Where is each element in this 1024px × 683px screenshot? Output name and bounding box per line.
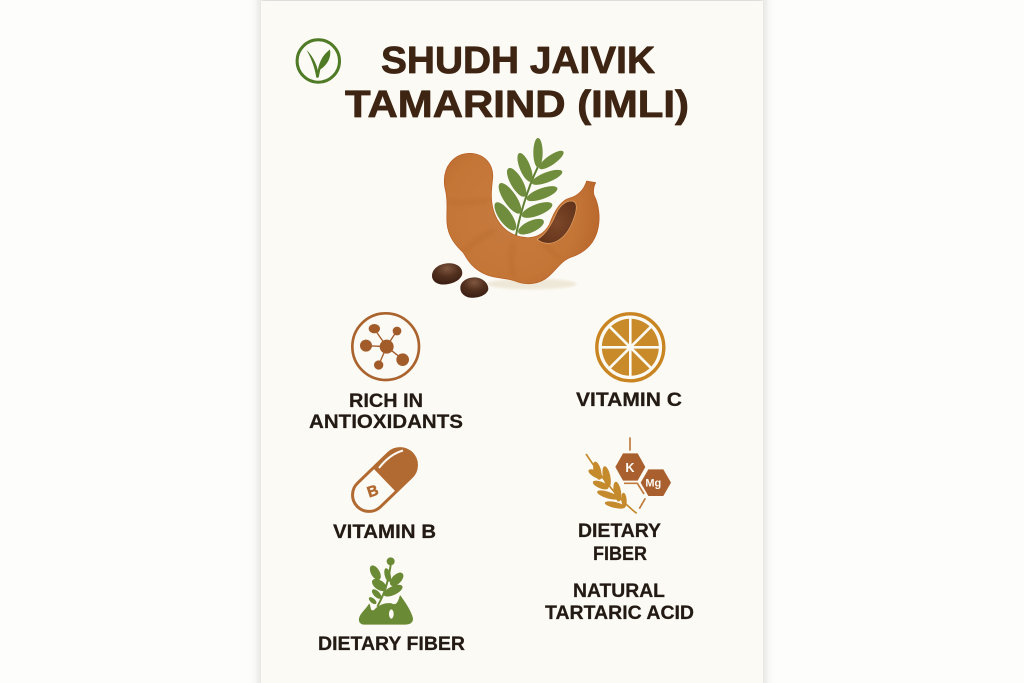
icon: molecule xyxy=(352,313,419,380)
feature: vitamin C xyxy=(576,314,682,411)
icon: organic leaf badge xyxy=(297,40,339,82)
label: DIETARY xyxy=(578,521,661,542)
feature: dietary fiber (wheat and minerals) xyxy=(578,437,671,565)
icon: orange slice xyxy=(597,314,664,381)
label xyxy=(578,521,661,565)
seeds xyxy=(432,263,488,298)
label: ANTIOXIDANTS xyxy=(309,412,463,433)
label: RICH IN xyxy=(349,391,423,412)
pod body xyxy=(444,153,599,284)
icon: green plant on mound xyxy=(359,557,413,625)
feature: dietary fiber (plant) xyxy=(318,557,465,655)
hexagon: K xyxy=(615,453,645,481)
pod creases xyxy=(448,200,560,280)
icon: capsule: B xyxy=(365,482,381,501)
pod opening xyxy=(537,201,576,243)
icon: wheat with mineral hexagons: K xyxy=(625,461,635,475)
label: VITAMIN B xyxy=(333,522,436,543)
label: natural tartaric acid: NATURAL xyxy=(573,581,665,602)
label: natural tartaric acid: TARTARIC ACID xyxy=(545,603,694,624)
label: VITAMIN C xyxy=(576,390,682,411)
panel shadow xyxy=(259,0,765,683)
label: FIBER xyxy=(593,544,647,565)
label: natural tartaric acid xyxy=(545,581,694,624)
icon: wheat with mineral hexagons xyxy=(586,437,671,513)
feature: vitamin B xyxy=(333,442,436,543)
feature: rich in antioxidants xyxy=(309,313,463,433)
label: DIETARY FIBER xyxy=(318,634,465,655)
title: SHUDH JAIVIK xyxy=(381,40,656,82)
icon: wheat with mineral hexagons: Mg xyxy=(645,478,661,490)
hexagon: Mg xyxy=(641,469,671,496)
label xyxy=(309,391,463,433)
ground shadow xyxy=(487,279,577,289)
panel: poster card xyxy=(261,1,763,683)
title xyxy=(345,40,689,126)
illustration: tamarind pod, leaf and seeds xyxy=(432,138,599,298)
leaf sprig xyxy=(491,138,566,238)
title: TAMARIND (IMLI) xyxy=(345,84,689,126)
